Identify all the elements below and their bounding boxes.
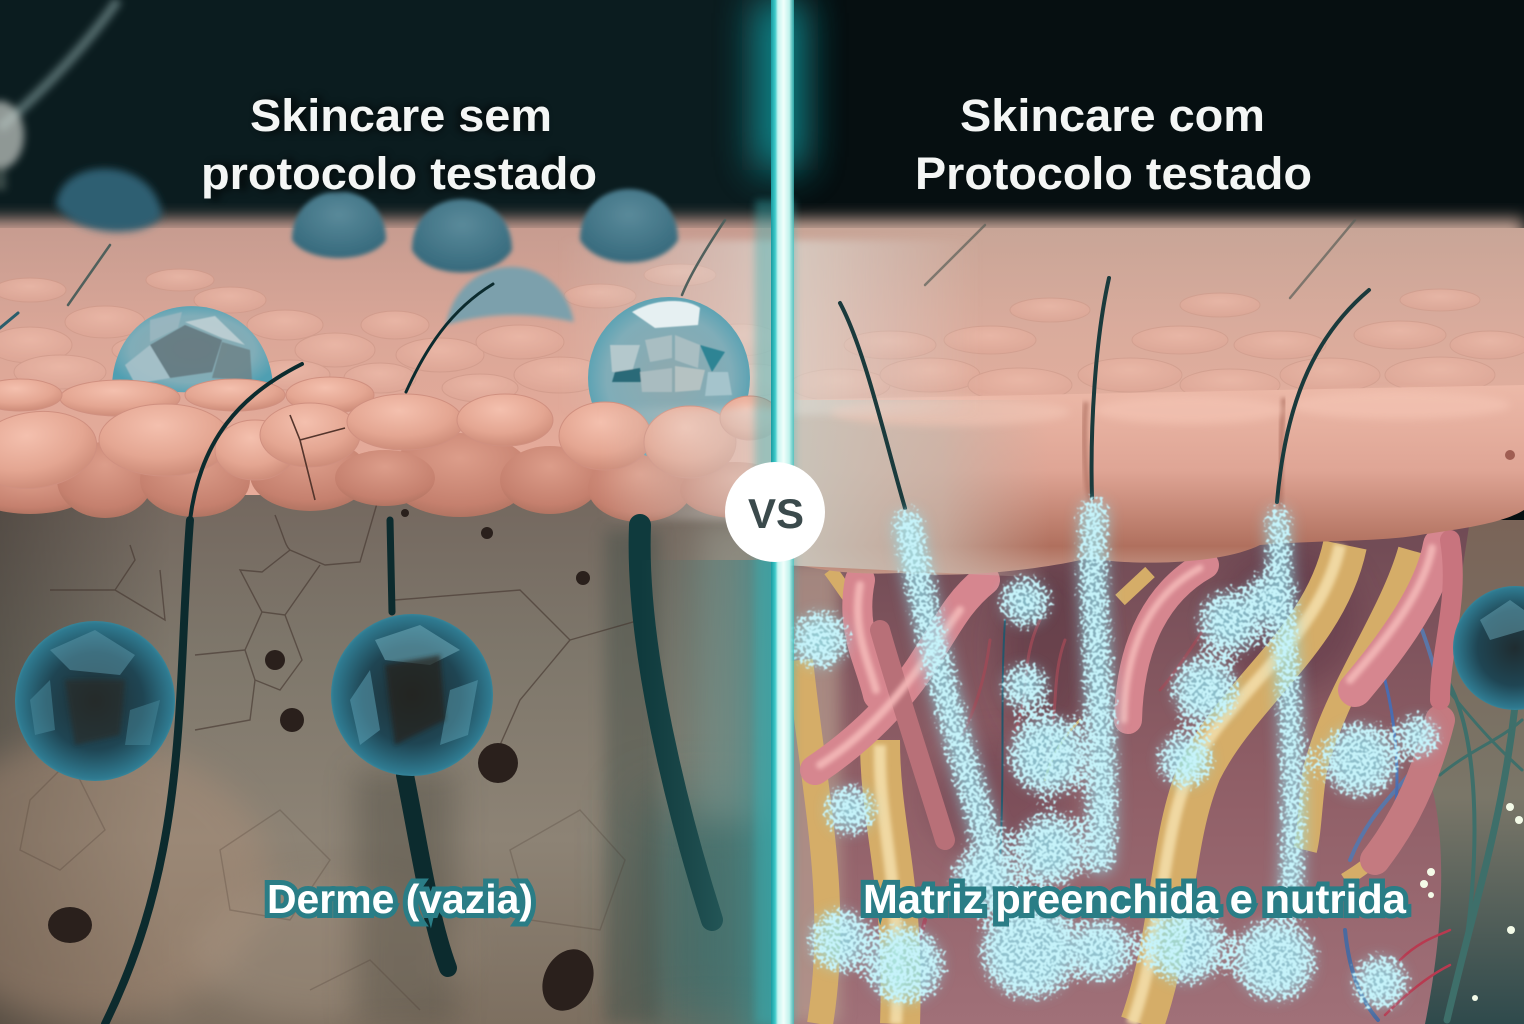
small epidermis cells, left bbox=[0, 264, 710, 402]
large skin cells, right bbox=[780, 385, 1524, 578]
pale haze on upper skin near divider bbox=[600, 237, 771, 402]
skin surface, left bbox=[0, 219, 820, 498]
versus badge bbox=[725, 462, 825, 562]
upper water droplets, blurred bbox=[56, 169, 678, 325]
panel: left, skincare without protocol bbox=[0, 0, 820, 1024]
lower droplet, centre bbox=[331, 614, 493, 776]
thin vessels bbox=[890, 620, 1450, 1020]
teal fade near divider bbox=[665, 560, 771, 1024]
dermis cracks bbox=[20, 500, 640, 1010]
droplet, right edge bbox=[1453, 586, 1524, 710]
versus badge: VS bbox=[748, 490, 804, 537]
heading: right bbox=[915, 90, 1312, 199]
nutrient particles bbox=[782, 510, 1448, 1018]
pale haze on skin near divider bbox=[794, 237, 943, 415]
heading: left: Skincare sem bbox=[250, 90, 552, 141]
faceted droplet, right of left panel bbox=[588, 297, 750, 459]
back row of skin cells, left bbox=[0, 433, 790, 522]
central glowing divider bbox=[755, 0, 805, 1024]
yellow collagen fibres bbox=[800, 545, 1410, 1024]
heading: left: Skincare sem bbox=[256, 90, 546, 141]
corner fibres and glowing points bbox=[1420, 650, 1523, 1020]
label: filled and nourished matrix: Matriz preenchida e nutrida bbox=[863, 876, 1407, 922]
small epidermis cells, right bbox=[877, 288, 1524, 396]
label: empty dermis: Derme (vazia) bbox=[267, 876, 533, 922]
hair shafts, right bbox=[840, 220, 1369, 508]
lower droplet, left bbox=[15, 621, 175, 781]
heading: right: Skincare com bbox=[960, 90, 1265, 141]
front row of skin cells, left bbox=[0, 377, 780, 496]
pink vessels bbox=[815, 540, 1453, 860]
background strand bbox=[0, 0, 118, 190]
heading: left bbox=[201, 90, 597, 199]
faceted droplet, middle left bbox=[112, 306, 273, 392]
pale haze on front cells near divider bbox=[624, 404, 771, 524]
heading: right: Protocolo testado bbox=[915, 148, 1312, 199]
heading: left: protocolo testado bbox=[201, 148, 597, 199]
nutrient particle haze bbox=[796, 515, 1434, 1004]
skin surface, right bbox=[790, 206, 1524, 400]
skin crack bbox=[290, 415, 345, 500]
dermis base, right bbox=[780, 520, 1524, 1024]
dermis, left bbox=[0, 495, 780, 1024]
heading: left: protocolo testado bbox=[209, 148, 589, 199]
panel: right, skincare with protocol bbox=[760, 0, 1524, 1024]
pores bbox=[48, 509, 603, 1019]
hair shafts, left bbox=[0, 220, 725, 1024]
